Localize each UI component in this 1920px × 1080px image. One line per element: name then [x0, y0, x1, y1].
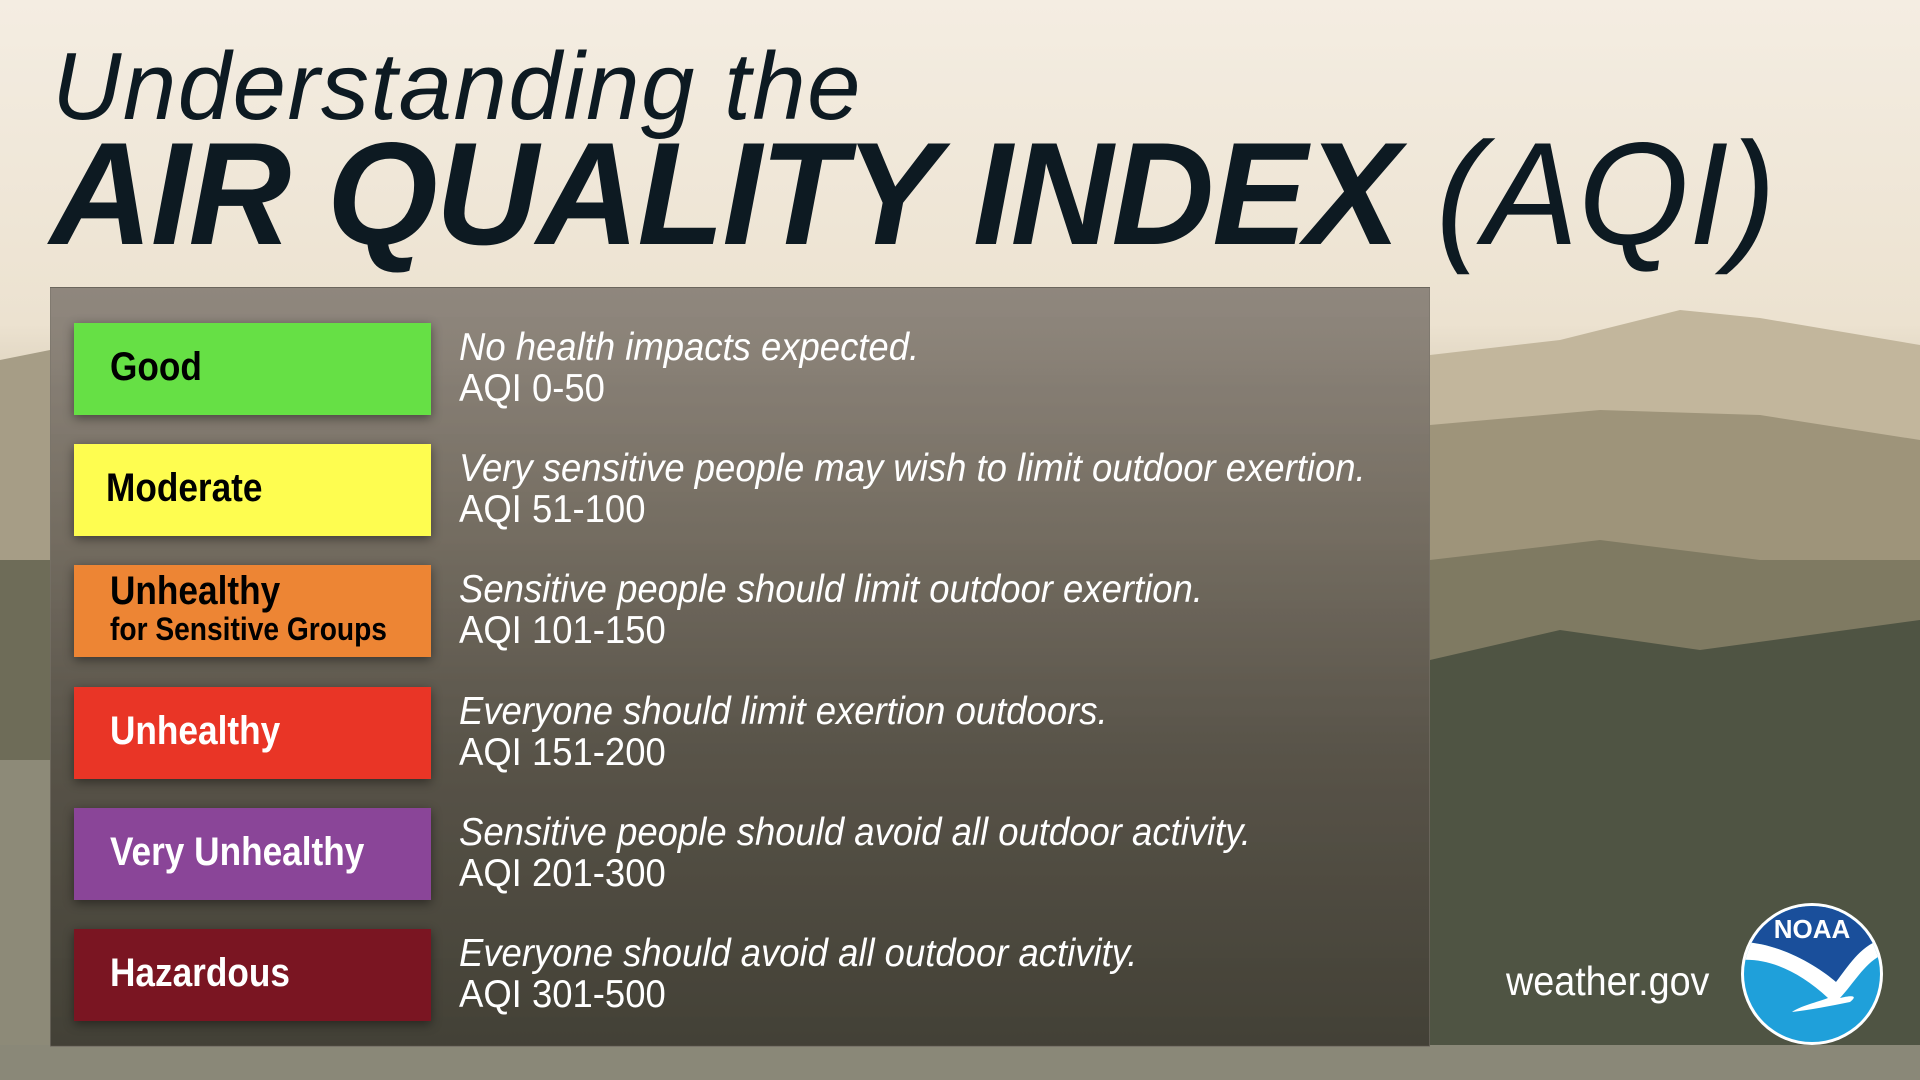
row: hazardous: Hazardous: [110, 951, 290, 995]
row: moderate: [68, 442, 1366, 544]
row: hazardous: AQI 301-500: [459, 973, 666, 1016]
row: moderate: Very sensitive people may wish to limit outdoor exertion.: [459, 447, 1366, 490]
title line 2: AIR QUALITY INDEX (AQI): [50, 112, 1776, 275]
row: unhealthy: Everyone should limit exertion outdoors.: [459, 690, 1108, 733]
row: good: No health impacts expected.: [459, 326, 919, 369]
row: good: [68, 320, 919, 424]
row: very unhealthy: AQI 201-300: [459, 852, 666, 895]
row: unhealthy sensitive: Unhealthy: [110, 569, 280, 613]
row: unhealthy sensitive: Sensitive people should limit outdoor exertion.: [459, 568, 1203, 611]
panel: AQI categories: [50, 287, 1430, 1047]
row: very unhealthy: Very Unhealthy: [110, 830, 364, 874]
title line 1: Understanding the: [52, 33, 862, 140]
icon: NOAA logo: NOAA: [1774, 914, 1850, 944]
row: very unhealthy: Sensitive people should avoid all outdoor activity.: [459, 811, 1251, 854]
row: hazardous: Everyone should avoid all outdoor activity.: [459, 932, 1137, 975]
icon: NOAA logo: [1741, 903, 1883, 1045]
row: unhealthy: Unhealthy: [110, 709, 280, 753]
row: moderate: Moderate: [106, 466, 262, 510]
row: good: Good: [110, 345, 202, 389]
row: moderate: AQI 51-100: [459, 488, 646, 531]
row: unhealthy: AQI 151-200: [459, 731, 666, 774]
row: unhealthy sensitive: AQI 101-150: [459, 609, 666, 652]
row: unhealthy: [70, 686, 1108, 786]
row: unhealthy sensitive: for Sensitive Groups: [110, 611, 387, 647]
row: very unhealthy: [70, 807, 1251, 907]
row: good: AQI 0-50: [459, 367, 605, 410]
row: unhealthy sensitive: [69, 563, 1203, 665]
weather.gov text: weather.gov: [1506, 958, 1709, 1004]
row: hazardous: [70, 928, 1137, 1028]
